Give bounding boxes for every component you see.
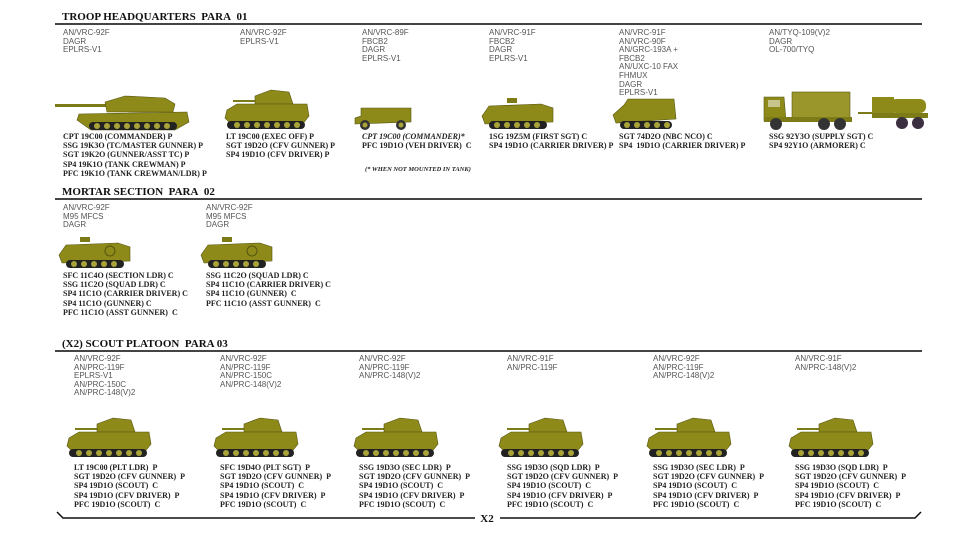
icon: humvee bbox=[354, 108, 412, 130]
crew: mortar 2: SP4 11C1O (GUNNER) C bbox=[206, 289, 297, 298]
icon: bradley hq bbox=[224, 90, 310, 129]
equipment: hq col5: AN/VRC-90F bbox=[619, 37, 666, 46]
crew: m113: SP4 19D1O (CARRIER DRIVER) P bbox=[489, 141, 613, 150]
crew: tank: SSG 19K3O (TC/MASTER GUNNER) P bbox=[63, 141, 203, 150]
equipment: scout cols: AN/PRC-148(V)2 bbox=[74, 388, 135, 397]
equipment: scout cols: AN/VRC-92F bbox=[359, 354, 406, 363]
crew: scout vehicles: SP4 19D1O (CFV DRIVER) P bbox=[74, 491, 179, 500]
icon: m577 bbox=[612, 98, 676, 129]
equipment: scout cols: EPLRS-V1 bbox=[74, 371, 113, 380]
equipment: hq col4: AN/VRC-91F bbox=[489, 28, 536, 37]
crew: bradley hq: LT 19C00 (EXEC OFF) P bbox=[226, 132, 314, 141]
crew: scout vehicles: SP4 19D1O (CFV DRIVER) P bbox=[220, 491, 325, 500]
crew: bradley hq bbox=[226, 132, 335, 159]
equipment: scout cols: AN/PRC-148(V)2 bbox=[359, 371, 420, 380]
equipment: hq col6: AN/TYQ-109(V)2 bbox=[769, 28, 830, 37]
bracket: x2: X2 bbox=[480, 513, 494, 525]
equipment: scout cols: AN/PRC-150C bbox=[220, 371, 272, 380]
equipment: mortar col1: M95 MFCS bbox=[63, 212, 103, 221]
crew: m577: SGT 74D2O (NBC NCO) C bbox=[619, 132, 713, 141]
crew: bradley hq: SGT 19D2O (CFV GUNNER) P bbox=[226, 141, 335, 150]
equipment: scout cols: AN/PRC-148(V)2 bbox=[653, 371, 714, 380]
equipment: scout cols: AN/PRC-148(V)2 bbox=[220, 380, 281, 389]
icon: tank bbox=[55, 96, 190, 130]
crew: mortar 1: SSG 11C2O (SQUAD LDR) C bbox=[63, 280, 166, 289]
equipment: hq col5: AN/GRC-193A + bbox=[619, 45, 678, 54]
equipment: hq col5: AN/VRC-91F bbox=[619, 28, 666, 37]
crew: scout vehicles: SP4 19D1O (SCOUT) C bbox=[795, 481, 879, 490]
icon: m113 bbox=[482, 98, 554, 129]
crew: scout vehicles: PFC 19D1O (SCOUT) C bbox=[507, 500, 593, 509]
crew: m113 bbox=[489, 132, 614, 150]
crew: scout vehicles: SP4 19D1O (CFV DRIVER) P bbox=[653, 491, 758, 500]
equipment: scout cols: AN/PRC-119F bbox=[507, 363, 558, 372]
crew: m113: 1SG 19Z5M (FIRST SGT) C bbox=[489, 132, 587, 141]
equipment: scout cols: AN/PRC-119F bbox=[653, 363, 704, 372]
equipment: hq col5: DAGR bbox=[619, 80, 642, 89]
equipment: hq col1 bbox=[63, 28, 110, 54]
crew: scout vehicles: SP4 19D1O (CFV DRIVER) P bbox=[507, 491, 612, 500]
bracket: x2 bbox=[56, 512, 922, 525]
equipment: mortar col1: AN/VRC-92F bbox=[63, 203, 110, 212]
crew: scout vehicles: LT 19C00 (PLT LDR) P bbox=[74, 463, 157, 472]
crew: scout vehicles: SP4 19D1O (SCOUT) C bbox=[653, 481, 737, 490]
crew: humvee bbox=[362, 132, 472, 150]
equipment: scout cols: AN/VRC-91F bbox=[795, 354, 842, 363]
crew: mortar 1: SFC 11C4O (SECTION LDR) C bbox=[63, 271, 174, 280]
equipment: scout cols: AN/PRC-119F bbox=[220, 363, 271, 372]
equipment: scout cols: AN/PRC-119F bbox=[359, 363, 410, 372]
equipment: scout cols: AN/VRC-92F bbox=[653, 354, 700, 363]
equipment: mortar col2: DAGR bbox=[206, 220, 229, 229]
crew: scout vehicles: SGT 19D2O (CFV GUNNER) P bbox=[74, 472, 185, 481]
heading: scout platoon: (X2) SCOUT PLATOON PARA 03 bbox=[62, 338, 228, 350]
icons: scout bradleys bbox=[66, 418, 874, 457]
crew: mortar 2: SP4 11C1O (CARRIER DRIVER) C bbox=[206, 280, 331, 289]
equipment: hq col5: AN/UXC-10 FAX bbox=[619, 62, 678, 71]
equipment: hq col2 bbox=[240, 28, 287, 46]
crew: truck: SP4 92Y1O (ARMORER) C bbox=[769, 141, 866, 150]
equipment: scout cols: AN/PRC-148(V)2 bbox=[795, 363, 856, 372]
crew: scout vehicles: PFC 19D1O (SCOUT) C bbox=[795, 500, 881, 509]
crew: scout vehicles: SP4 19D1O (SCOUT) C bbox=[220, 481, 304, 490]
equipment: hq col5: FHMUX bbox=[619, 71, 647, 80]
crew: scout vehicles: SSG 19D3O (SQD LDR) P bbox=[795, 463, 888, 472]
crew: scout vehicles: SP4 19D1O (SCOUT) C bbox=[507, 481, 591, 490]
crew: scout vehicles: SSG 19D3O (SEC LDR) P bbox=[359, 463, 451, 472]
heading: troop headquarters: TROOP HEADQUARTERS PARA 01 bbox=[62, 11, 248, 23]
equipment: hq col3 bbox=[362, 28, 409, 63]
equipment: scout cols: AN/PRC-150C bbox=[74, 380, 126, 389]
crew: tank: SP4 19K1O (TANK CREWMAN) P bbox=[63, 160, 186, 169]
icon: mortar carrier 2 bbox=[200, 237, 272, 268]
equipment: hq col1: EPLRS-V1 bbox=[63, 45, 102, 54]
equipment: hq col4: FBCB2 bbox=[489, 37, 515, 46]
equipment: mortar col2 bbox=[206, 203, 253, 229]
crew: mortar 2 bbox=[206, 271, 331, 308]
crew: scout vehicles: SFC 19D4O (PLT SGT) P bbox=[220, 463, 310, 472]
equipment: hq col5: EPLRS-V1 bbox=[619, 88, 658, 97]
crew: mortar 1 bbox=[63, 271, 188, 317]
equipment: hq col1: DAGR bbox=[63, 37, 86, 46]
crew: scout vehicles: PFC 19D1O (SCOUT) C bbox=[359, 500, 445, 509]
crew: scout vehicles: SGT 19D2O (CFV GUNNER) P bbox=[653, 472, 764, 481]
equipment: scout cols: AN/VRC-92F bbox=[74, 354, 121, 363]
note: (* WHEN NOT MOUNTED IN TANK) bbox=[365, 166, 471, 173]
equipment: hq col3: EPLRS-V1 bbox=[362, 54, 401, 63]
crew: mortar 1: SP4 11C1O (GUNNER) C bbox=[63, 299, 152, 308]
crew: mortar 1: SP4 11C1O (CARRIER DRIVER) C bbox=[63, 289, 188, 298]
equipment: hq col3: DAGR bbox=[362, 45, 385, 54]
crew: mortar 1: PFC 11C1O (ASST GUNNER) C bbox=[63, 308, 178, 317]
crew: scout vehicles: SSG 19D3O (SQD LDR) P bbox=[507, 463, 600, 472]
crew: scout vehicles: SGT 19D2O (CFV GUNNER) P bbox=[795, 472, 906, 481]
equipment: scout cols bbox=[74, 354, 856, 397]
equipment: hq col5: FBCB2 bbox=[619, 54, 645, 63]
equipment: hq col4: DAGR bbox=[489, 45, 512, 54]
crew: scout vehicles: SP4 19D1O (CFV DRIVER) P bbox=[795, 491, 900, 500]
crew: m577: SP4 19D1O (CARRIER DRIVER) P bbox=[619, 141, 745, 150]
crew: tank: SGT 19K2O (GUNNER/ASST TC) P bbox=[63, 150, 189, 159]
equipment: hq col6: OL-700/TYQ bbox=[769, 45, 814, 54]
crew: scout vehicles: SP4 19D1O (SCOUT) C bbox=[74, 481, 158, 490]
crew: bradley hq: SP4 19D1O (CFV DRIVER) P bbox=[226, 150, 329, 159]
equipment: hq col5 bbox=[619, 28, 678, 97]
equipment: scout cols: AN/PRC-119F bbox=[74, 363, 125, 372]
crew: scout vehicles: SGT 19D2O (CFV GUNNER) P bbox=[507, 472, 618, 481]
crew: scout vehicles: SGT 19D2O (CFV GUNNER) P bbox=[220, 472, 331, 481]
equipment: hq col3: FBCB2 bbox=[362, 37, 388, 46]
equipment: hq col1: AN/VRC-92F bbox=[63, 28, 110, 37]
crew: scout vehicles: PFC 19D1O (SCOUT) C bbox=[74, 500, 160, 509]
icon: truck and trailer bbox=[764, 92, 928, 130]
crew: scout vehicles: SGT 19D2O (CFV GUNNER) P bbox=[359, 472, 470, 481]
equipment: mortar col2: AN/VRC-92F bbox=[206, 203, 253, 212]
crew: mortar 2: SSG 11C2O (SQUAD LDR) C bbox=[206, 271, 309, 280]
heading: mortar section: MORTAR SECTION PARA 02 bbox=[62, 186, 215, 198]
equipment: mortar col1 bbox=[63, 203, 110, 229]
crew: humvee: CPT 19C00 (COMMANDER)* bbox=[362, 132, 465, 141]
crew: scout vehicles: SP4 19D1O (CFV DRIVER) P bbox=[359, 491, 464, 500]
crew: truck bbox=[769, 132, 873, 150]
crew: scout vehicles: SP4 19D1O (SCOUT) C bbox=[359, 481, 443, 490]
equipment: hq col6: DAGR bbox=[769, 37, 792, 46]
equipment: hq col3: AN/VRC-89F bbox=[362, 28, 409, 37]
crew: mortar 2: PFC 11C1O (ASST GUNNER) C bbox=[206, 299, 321, 308]
crew: truck: SSG 92Y3O (SUPPLY SGT) C bbox=[769, 132, 873, 141]
crew: tank: CPT 19C00 (COMMANDER) P bbox=[63, 132, 172, 141]
crew: tank: PFC 19K1O (TANK CREWMAN/LDR) P bbox=[63, 169, 207, 178]
equipment: scout cols: AN/VRC-91F bbox=[507, 354, 554, 363]
equipment: hq col4: EPLRS-V1 bbox=[489, 54, 528, 63]
crew: tank bbox=[63, 132, 207, 178]
crew: scout vehicles: PFC 19D1O (SCOUT) C bbox=[220, 500, 306, 509]
crew: humvee: PFC 19D1O (VEH DRIVER) C bbox=[362, 141, 472, 150]
icon: mortar carrier 1 bbox=[58, 237, 130, 268]
equipment: hq col6 bbox=[769, 28, 830, 54]
equipment: hq col2: AN/VRC-92F bbox=[240, 28, 287, 37]
crew: m577 bbox=[619, 132, 746, 150]
crew: scout vehicles: SSG 19D3O (SEC LDR) P bbox=[653, 463, 745, 472]
crew: scout vehicles: PFC 19D1O (SCOUT) C bbox=[653, 500, 739, 509]
equipment: scout cols: AN/VRC-92F bbox=[220, 354, 267, 363]
equipment: hq col4 bbox=[489, 28, 536, 63]
equipment: mortar col1: DAGR bbox=[63, 220, 86, 229]
equipment: mortar col2: M95 MFCS bbox=[206, 212, 246, 221]
equipment: hq col2: EPLRS-V1 bbox=[240, 37, 279, 46]
